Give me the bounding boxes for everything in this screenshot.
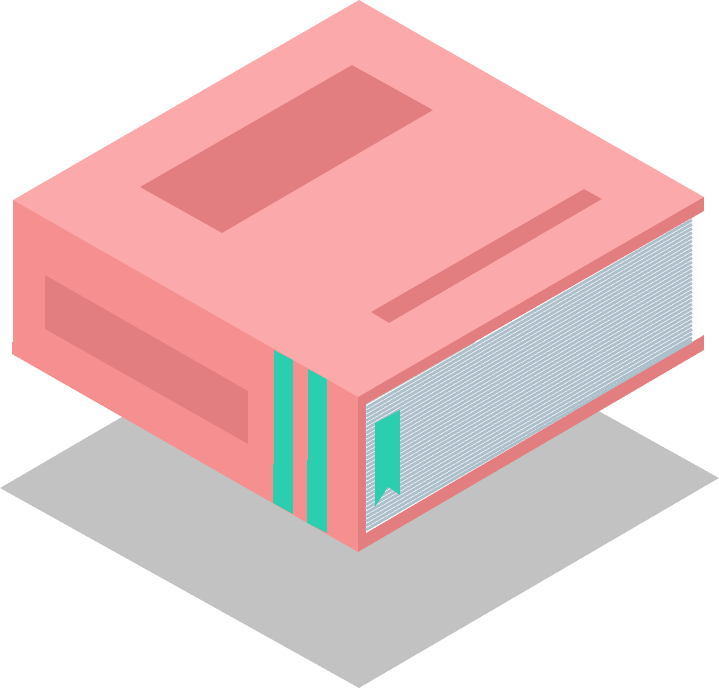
cover title panel [140,65,433,233]
icon: bookmark ribbon [375,410,400,507]
spine face [12,200,358,552]
cover subtitle bar [371,189,602,323]
top cover [13,0,704,397]
page block [366,219,692,533]
book [12,0,704,552]
spine label panel [45,275,248,444]
page lines [366,220,692,530]
spine teal band 1 [273,350,293,514]
top cover edge [358,197,704,552]
ground shadow [0,278,719,688]
page background [366,219,692,533]
spine teal band 2 [307,369,327,533]
